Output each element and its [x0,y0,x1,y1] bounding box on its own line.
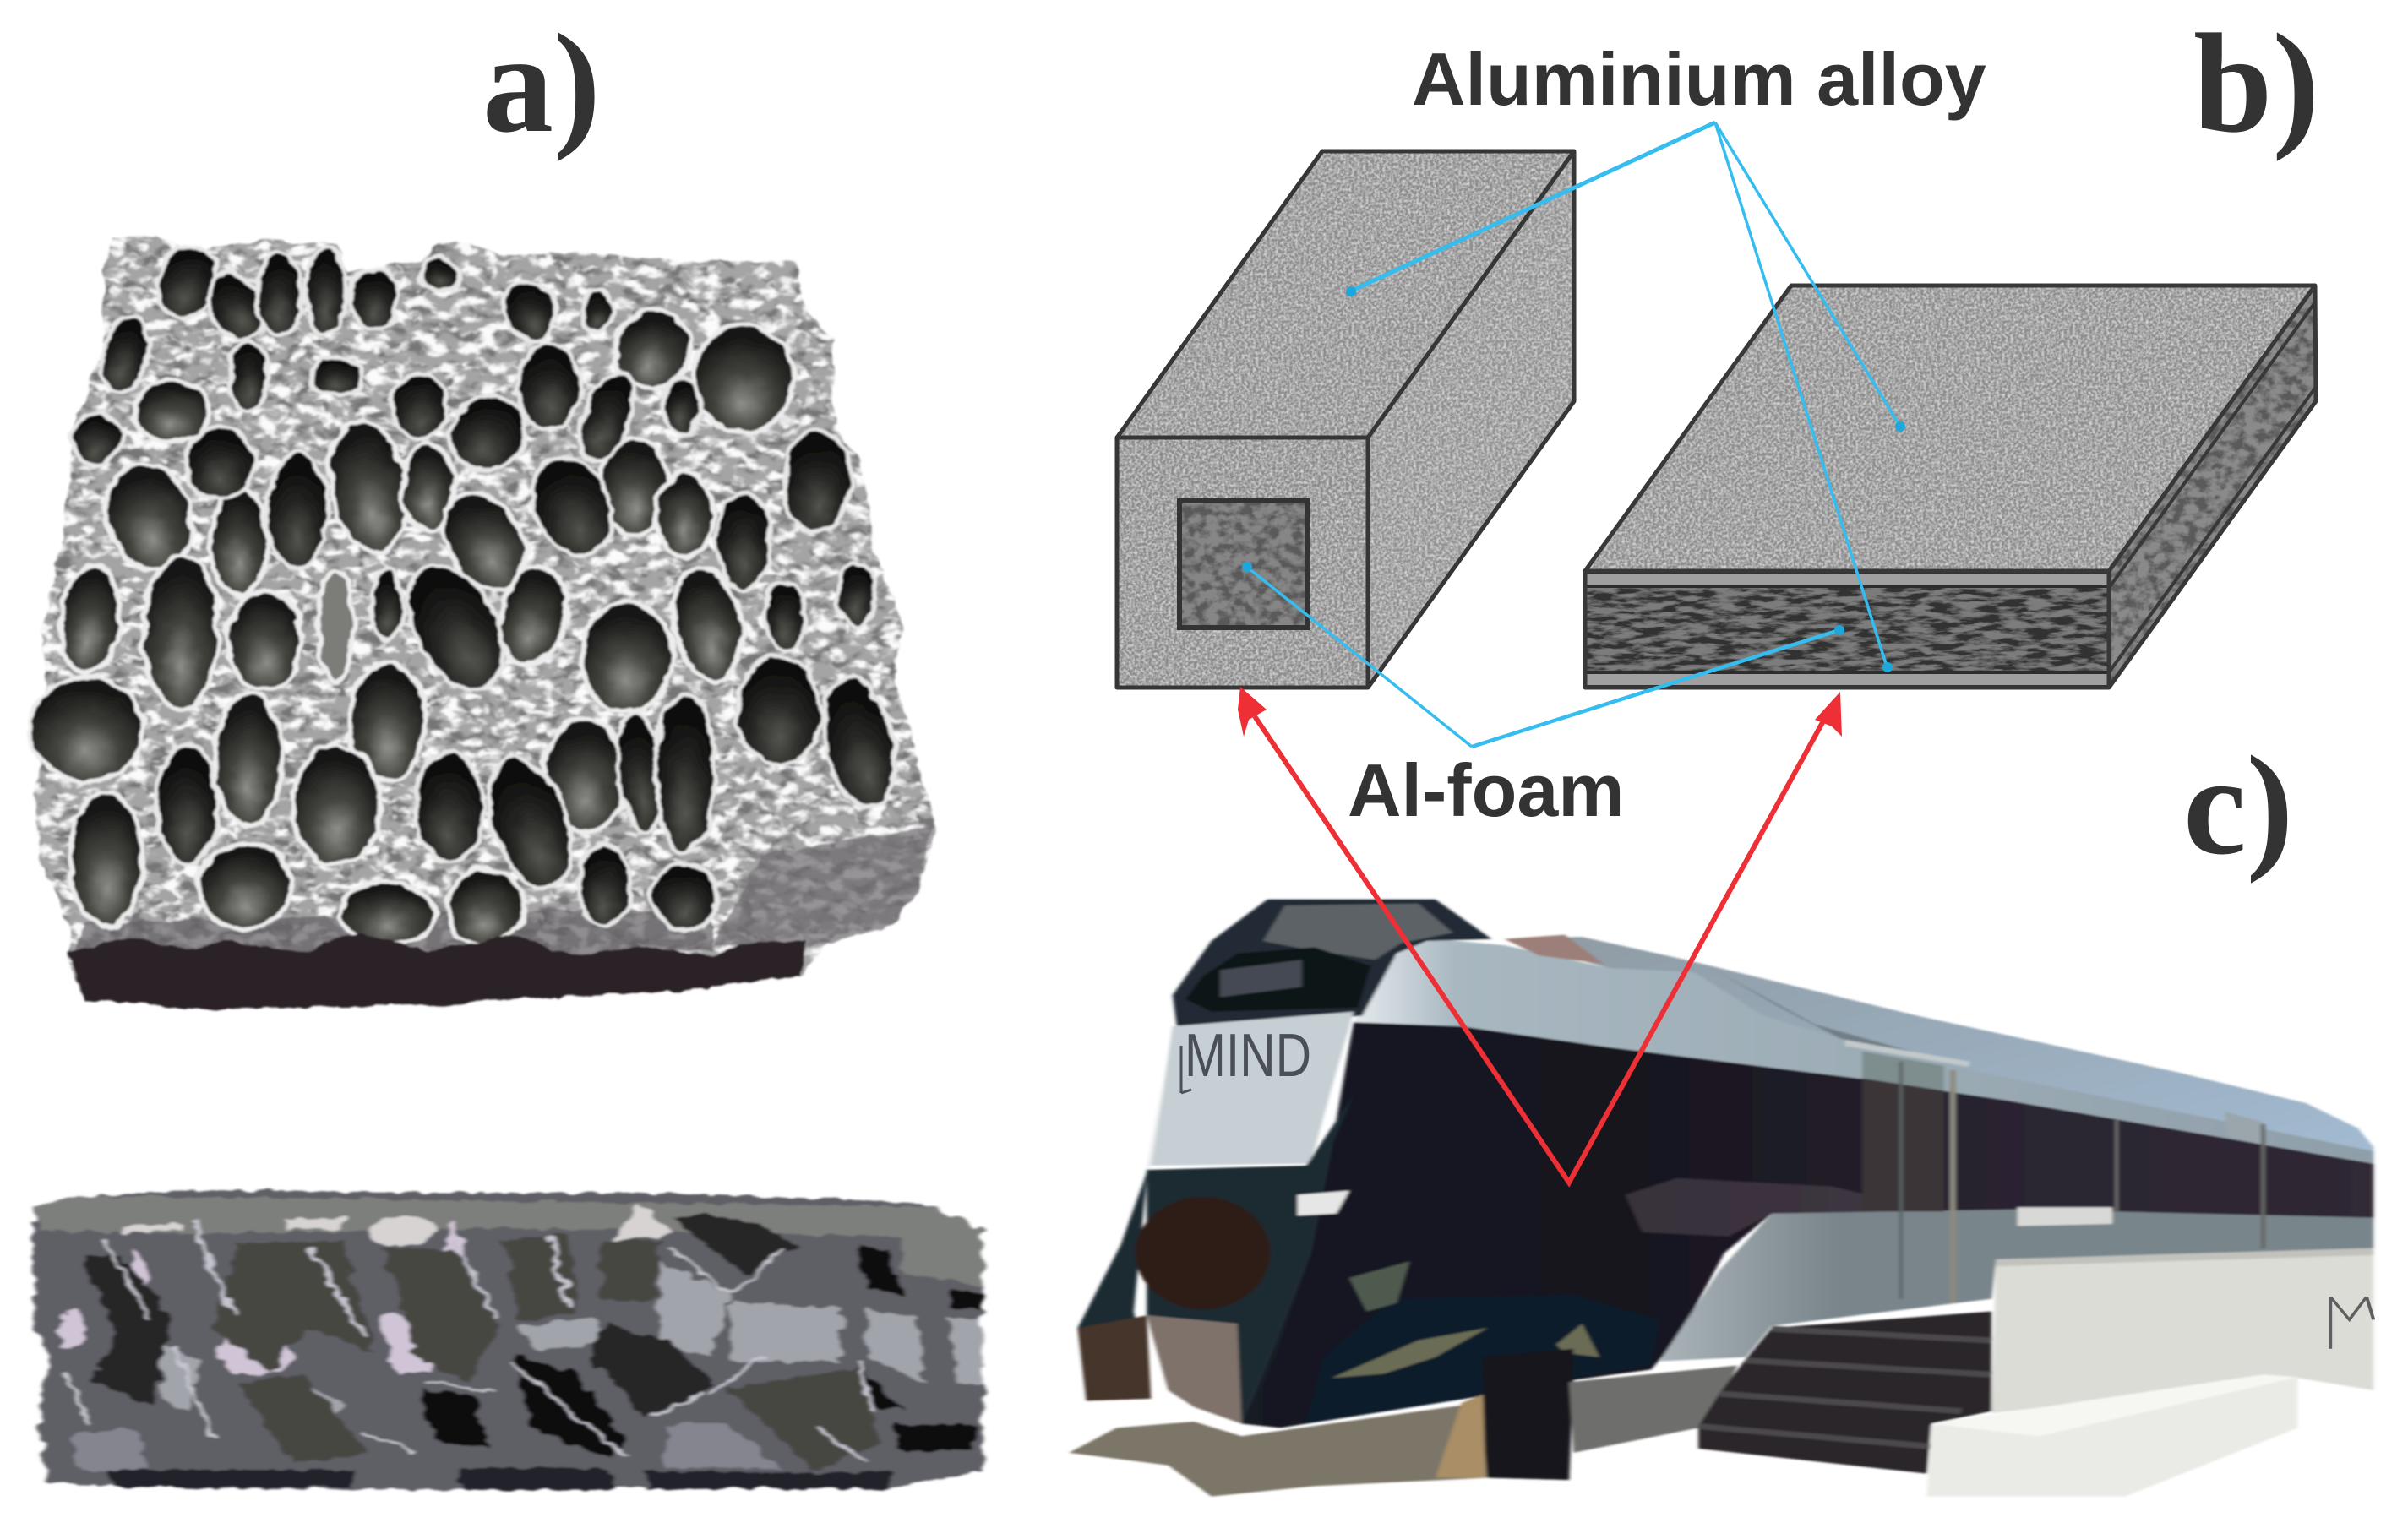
roof [1505,937,2373,1161]
doors [1845,1040,1970,1067]
label: Aluminium alloy: Aluminium alloy [1412,37,1986,121]
main dark body [1241,1022,2373,1480]
front white panel [1151,1012,1354,1166]
silver curve skirt [1659,1210,2373,1362]
photo: train [1069,900,2373,1497]
leader lines: Al-foam [1242,562,1844,747]
steps [1698,1311,1991,1474]
diagram: square tube with Al-foam core [1117,151,1574,688]
train front logo: MIND: MIND [1185,1022,1311,1090]
label: Al-foam: Al-foam [1348,748,1625,832]
silver side band [1354,939,2373,1164]
photo: aluminium foam block, side view [34,1190,983,1490]
panel label c): c) [2183,727,2294,884]
diagram: sandwich panel [1585,286,2316,688]
red arrows from train to structures [1238,687,1842,1183]
front lower [1147,1095,1354,1423]
white wall [1991,1250,2373,1413]
leader lines: Aluminium alloy [1346,122,1905,672]
panel label b): b) [2193,5,2319,162]
cab upper [1173,900,1491,1026]
ground shadow [1069,1403,1487,1497]
train logo on wall [2330,1297,2373,1349]
panel label a): a) [482,5,601,162]
photo: aluminium foam block, top view [31,237,934,1009]
wheel [1483,1349,1573,1480]
